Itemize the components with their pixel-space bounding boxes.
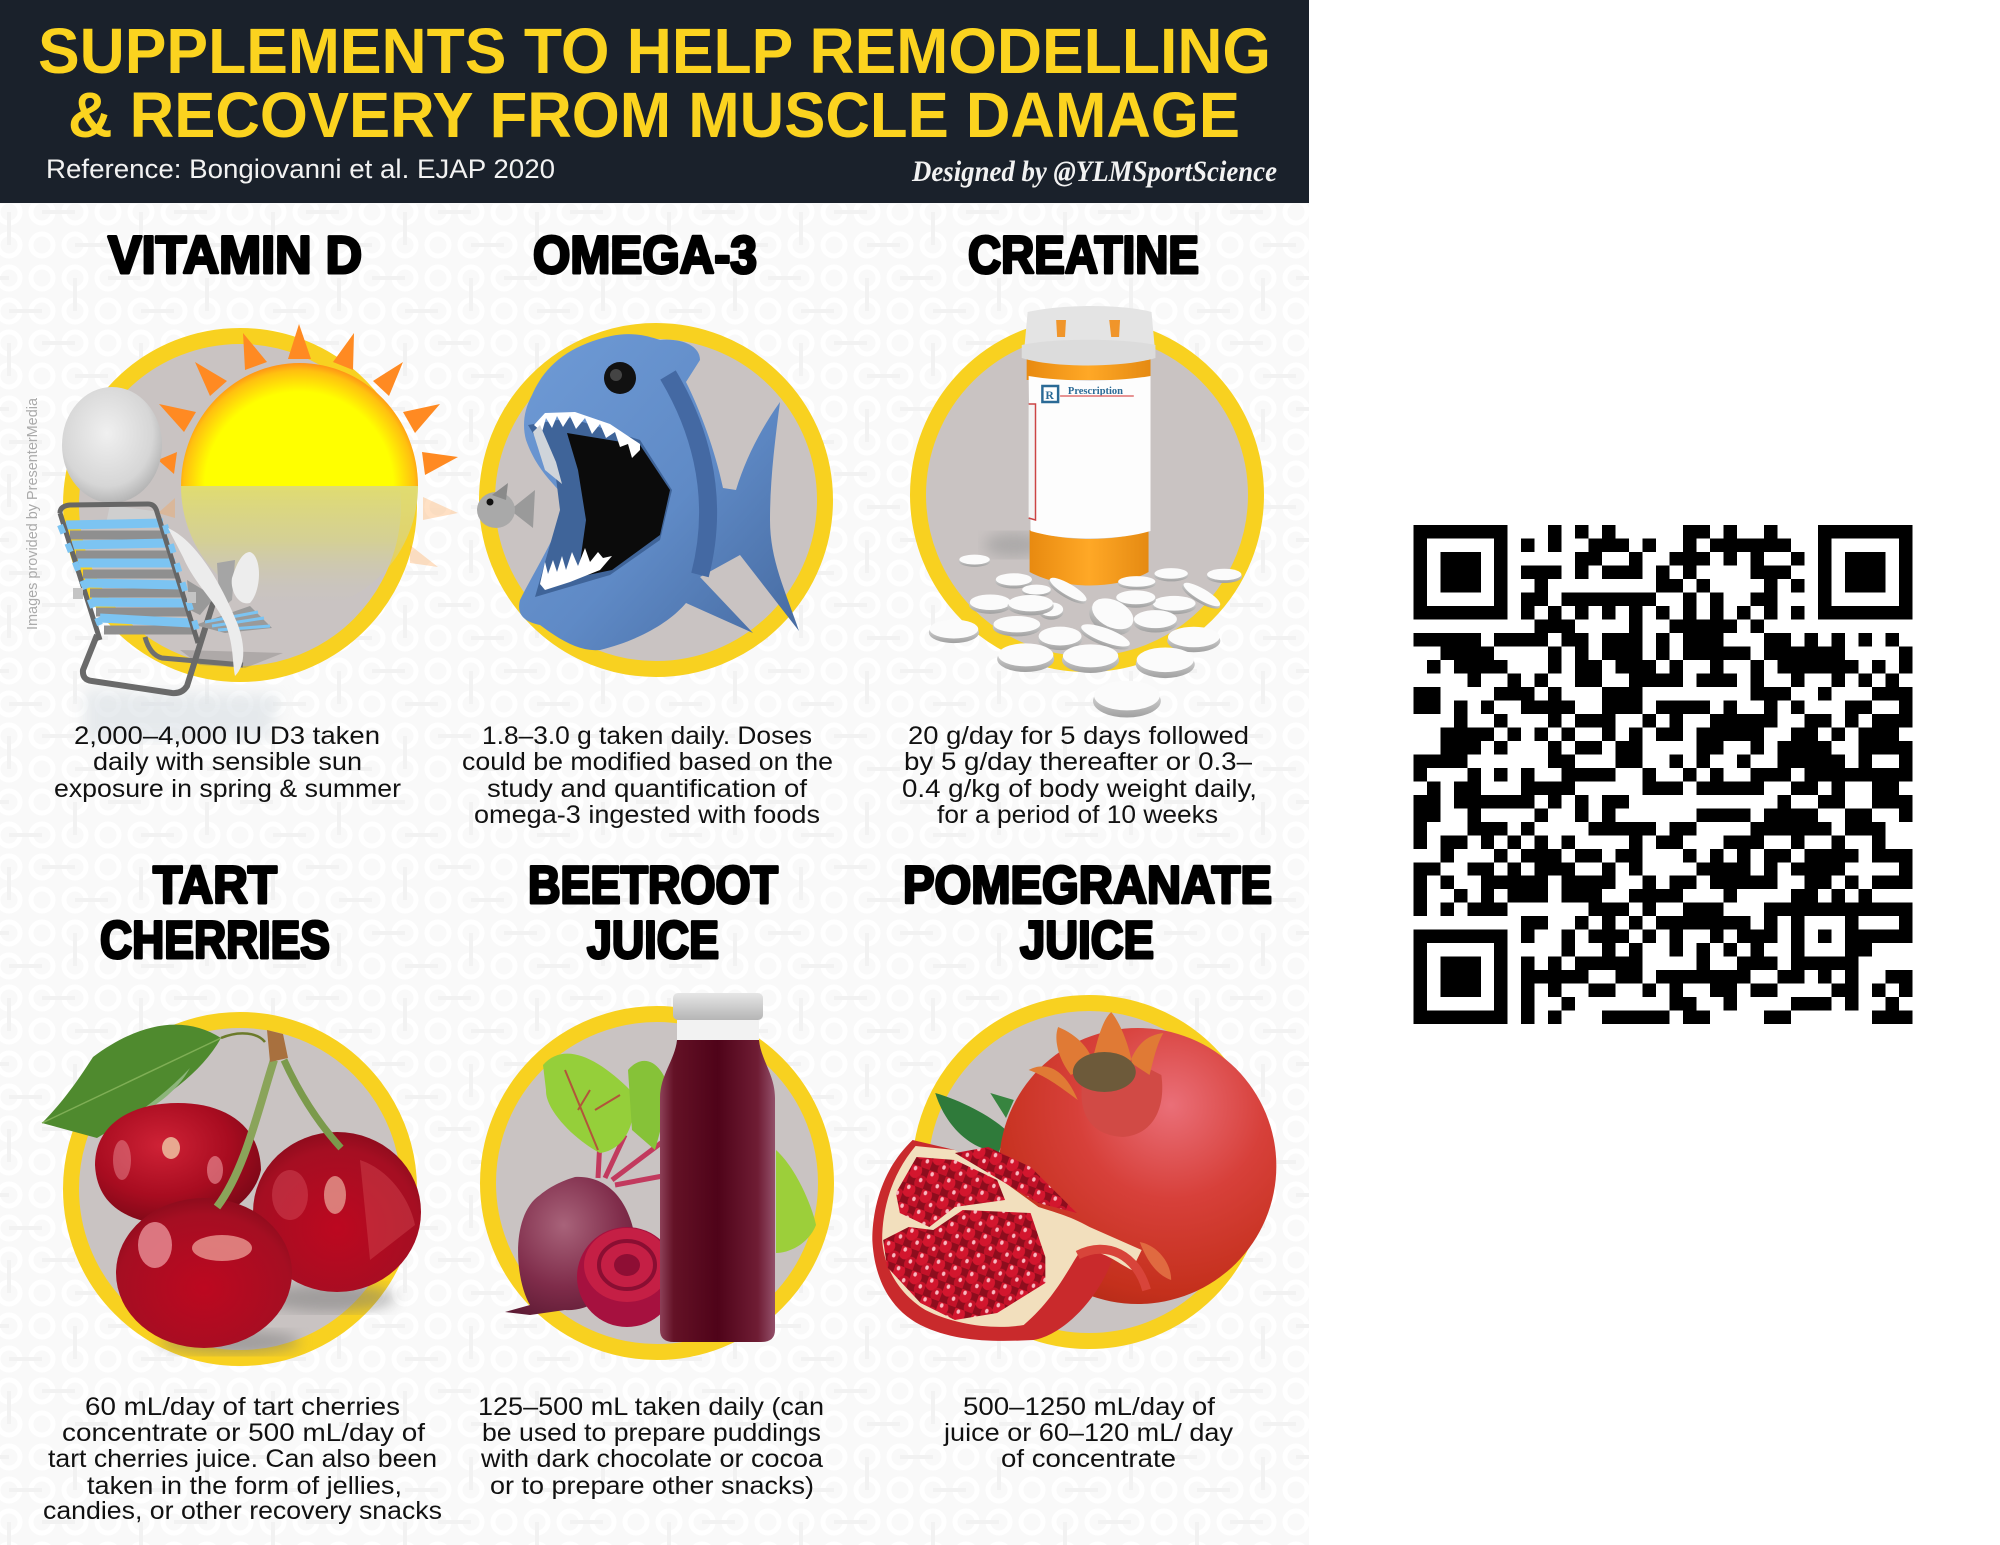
icon: yellow ring: [487, 331, 825, 669]
text: cherries dose: tart cherries juice. Can also been: [48, 1445, 437, 1473]
text: omega-3 dose: omega-3 ingested with foods: [474, 801, 820, 829]
panel: vitamin D: [54, 226, 458, 803]
icon: sun: [158, 324, 458, 609]
heading: creatine: CREATINE: [968, 226, 1199, 285]
text: beetroot dose: with dark chocolate or cocoa: [480, 1445, 823, 1473]
heading: beetroot juice: [528, 856, 778, 970]
heading: pomegranate juice: [903, 856, 1272, 970]
title: [38, 15, 1271, 151]
icon: cherries: [42, 1025, 421, 1354]
panel: tart cherries: [42, 856, 442, 1525]
text: omega-3 dose: could be modified based on the: [462, 748, 833, 776]
panel: beetroot juice: [478, 856, 826, 1500]
panel: pomegranate juice: [872, 856, 1276, 1473]
heading: vitamin D: VITAMIN D: [108, 226, 362, 285]
text: cherries dose: [43, 1393, 442, 1525]
panel: omega-3: [462, 226, 833, 829]
icon: big fish: [519, 334, 799, 650]
text: creatine dose: [902, 722, 1257, 829]
text: cherries dose: concentrate or 500 mL/day of: [62, 1419, 425, 1447]
text: beetroot dose: be used to prepare puddings: [482, 1419, 821, 1447]
text: omega-3 dose: [462, 722, 833, 829]
text: creatine dose: 0.4 g/kg of body weight daily,: [902, 775, 1257, 803]
text: pomegranate dose: juice or 60–120 mL/ day: [943, 1419, 1234, 1447]
text: vitamin D dose: 2,000–4,000 IU D3 taken: [74, 722, 380, 750]
icon: yellow ring: [488, 1014, 826, 1352]
icon: pill bottle: R: [1045, 388, 1054, 402]
heading: pomegranate juice: JUICE: [1020, 911, 1154, 970]
text: omega-3 dose: study and quantification of: [487, 775, 807, 803]
pomegranate crown: [1029, 1012, 1163, 1137]
image credit: Images provided by PresenterMedia: [25, 397, 41, 630]
text: cherries dose: candies, or other recovery snacks: [43, 1497, 442, 1525]
pomegranate wedge: [872, 1140, 1171, 1341]
reference line: Reference: Bongiovanni et al. EJAP 2020: [46, 154, 555, 184]
icon: yellow ring: [920, 1003, 1258, 1341]
icon: beetroot: [505, 1054, 816, 1327]
text: beetroot dose: 125–500 mL taken daily (can: [478, 1393, 824, 1421]
background panel: [0, 0, 1309, 1545]
icon: yellow ring: [71, 1020, 409, 1358]
text: pomegranate dose: of concentrate: [1001, 1445, 1176, 1473]
text: vitamin D dose: [54, 722, 401, 803]
heading: beetroot juice: JUICE: [587, 911, 719, 970]
icon: scattered pills: [929, 555, 1242, 718]
text: cherries dose: 60 mL/day of tart cherries: [85, 1393, 400, 1421]
heading: tart cherries: [100, 856, 330, 970]
text: omega-3 dose: 1.8–3.0 g taken daily. Doses: [482, 722, 812, 750]
text: creatine dose: by 5 g/day thereafter or 0.3–: [904, 748, 1252, 776]
heading: omega-3: OMEGA-3: [533, 226, 757, 285]
text: pomegranate dose: 500–1250 mL/day of: [963, 1393, 1215, 1421]
text: cherries dose: taken in the form of jellies,: [87, 1472, 402, 1500]
heading: pomegranate juice: POMEGRANATE: [903, 856, 1272, 915]
heading: tart cherries: CHERRIES: [100, 911, 330, 970]
panel: creatine: [902, 226, 1257, 829]
QR code: [1413, 532, 1912, 1017]
designer credit: Designed by @YLMSportScience: [911, 155, 1277, 188]
header band: [0, 0, 1309, 203]
icon: juice bottle: [660, 993, 775, 1342]
title: SUPPLEMENTS TO HELP REMODELLING: [38, 15, 1271, 87]
title: & RECOVERY FROM MUSCLE DAMAGE: [68, 79, 1240, 151]
text: beetroot dose: or to prepare other snacks): [490, 1472, 814, 1500]
text: vitamin D dose: exposure in spring & summer: [54, 775, 401, 803]
text: creatine dose: for a period of 10 weeks: [937, 801, 1218, 829]
icon: yellow ring: [918, 326, 1256, 664]
icon: small fish: [477, 483, 535, 528]
text: beetroot dose: [478, 1393, 824, 1500]
heading: tart cherries: TART: [153, 856, 277, 915]
icon: pomegranate: [872, 1012, 1276, 1341]
icon: pill bottle: [984, 306, 1155, 586]
heading: beetroot juice: BEETROOT: [528, 856, 778, 915]
text: pomegranate dose: [943, 1393, 1234, 1473]
icon: yellow ring: [71, 336, 409, 674]
icon: pill bottle: Prescription: [1068, 385, 1123, 397]
text: vitamin D dose: daily with sensible sun: [93, 748, 362, 776]
text: creatine dose: 20 g/day for 5 days followed: [908, 722, 1249, 750]
icon: figure in deck chair: [60, 387, 283, 740]
